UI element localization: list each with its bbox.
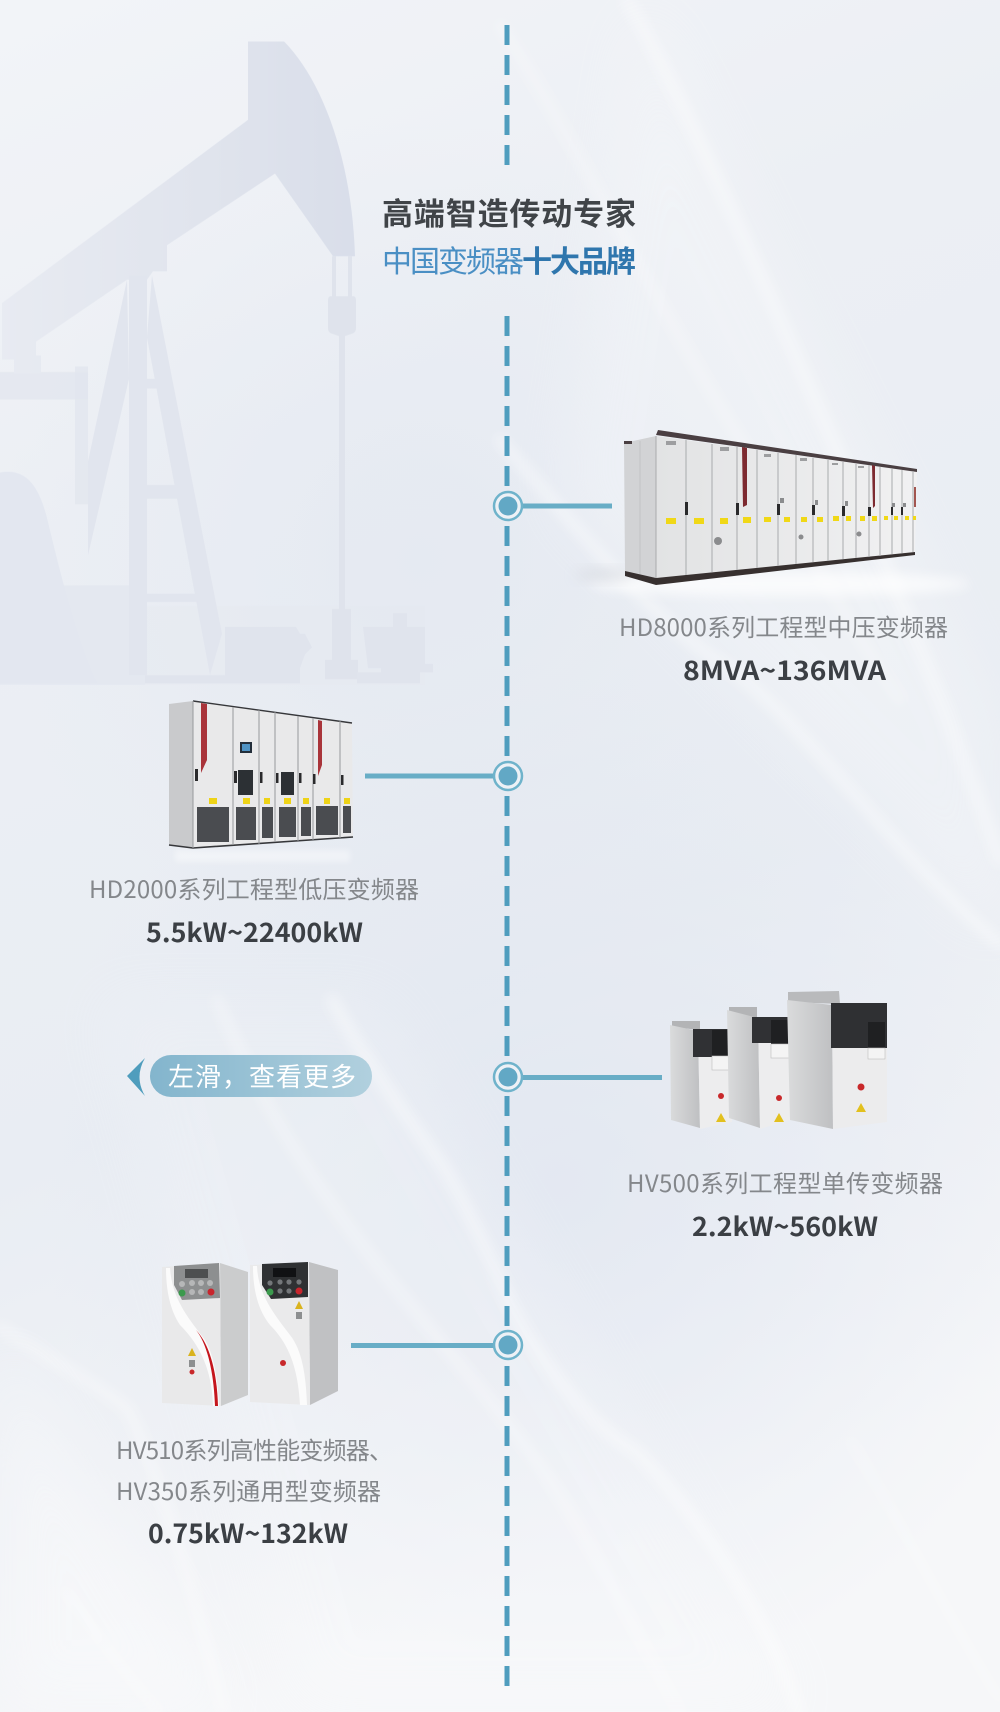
timeline dashed line <box>504 25 510 1690</box>
label: HD2000: HD2000系列工程型低压变频器 <box>89 870 419 905</box>
label: HV510 and HV350 <box>116 1431 393 1551</box>
label: HD8000 <box>619 608 948 688</box>
label: HD8000: HD8000系列工程型中压变频器 <box>619 608 948 643</box>
pump rod <box>325 256 358 679</box>
node 4 <box>351 1331 522 1359</box>
label: HV510 and HV350: HV510系列高性能变频器、 <box>116 1431 393 1466</box>
label: HV500: 2.2kW~560kW <box>692 1207 878 1244</box>
label: HV510 and HV350: HV350系列通用型变频器 <box>116 1472 381 1507</box>
node 3 <box>494 1063 662 1091</box>
label: HD2000: 5.5kW~22400kW <box>146 913 363 950</box>
title: 高端智造传动专家 <box>382 189 636 234</box>
pump base and motor <box>145 613 433 683</box>
pump A-frame <box>88 276 222 675</box>
oil pump silhouette <box>0 41 433 685</box>
icon: left arrow <box>127 1058 145 1096</box>
title <box>382 189 636 281</box>
label: HV500 <box>627 1164 943 1244</box>
title: 中国变频器十大品牌 <box>382 237 636 281</box>
node 1 <box>494 492 612 520</box>
node 2 <box>365 762 522 790</box>
pump beam and horse head <box>2 41 355 373</box>
swipe hint <box>127 1055 372 1097</box>
label: HV500: HV500系列工程型单传变频器 <box>627 1164 943 1199</box>
label: HV510 and HV350: 0.75kW~132kW <box>148 1514 348 1551</box>
swipe hint: 左滑，查看更多 <box>168 1057 356 1094</box>
product: HV510 and HV350 drives <box>162 1262 338 1406</box>
label: HD8000: 8MVA~136MVA <box>683 651 886 688</box>
product: HV500 drives <box>670 991 887 1129</box>
product: HD2000 cabinet <box>169 701 353 862</box>
product: HD8000 cabinet <box>575 430 970 596</box>
label: HD2000 <box>89 870 419 950</box>
